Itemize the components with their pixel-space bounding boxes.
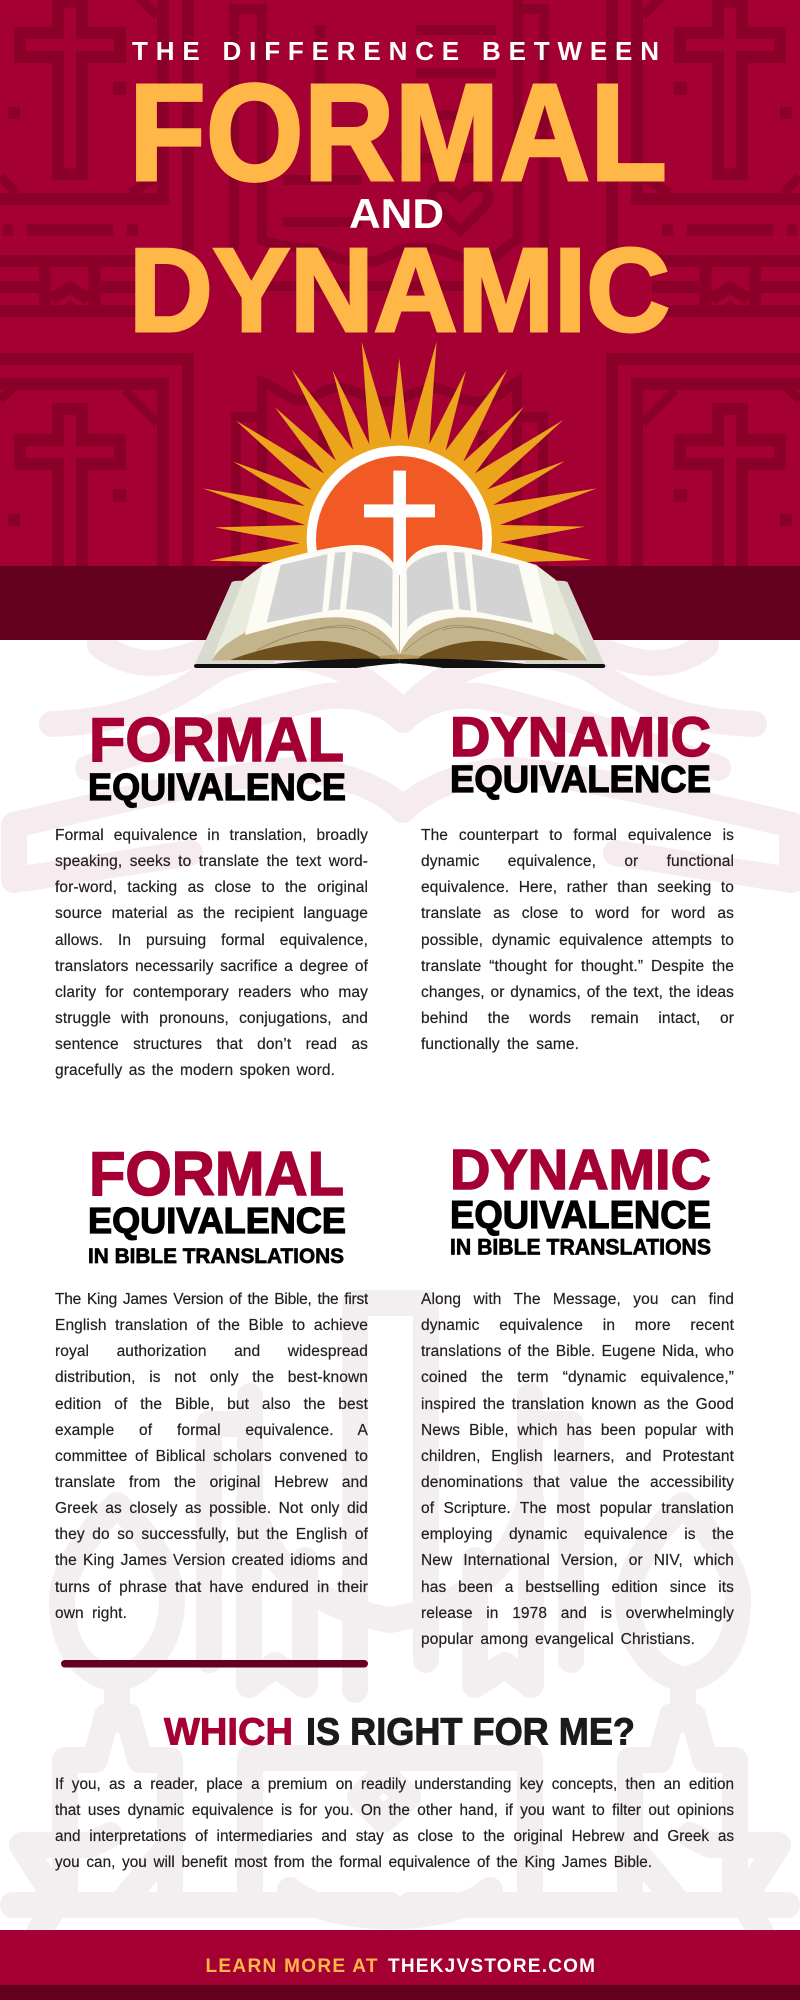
text block: which is right for me: you can, you will benefit most from the formal equivalence of the King James Bible. [55, 1854, 652, 1871]
text block: dynamic equivalence in Bible translations: denominations that value the accessibility [421, 1474, 734, 1491]
text block: formal equivalence in Bible translations: turns of phrase that have endured in their [55, 1579, 368, 1596]
heading: which is right for me: WHICH [164, 1712, 293, 1754]
title word: formal: FORMAL [129, 56, 667, 210]
footer text: THEKJVSTORE.COM [388, 1956, 595, 1977]
heading: formal equivalence in Bible translations: EQUIVALENCE [88, 1200, 346, 1241]
divider bar [61, 1660, 368, 1668]
text block: formal equivalence: allows. In pursuing formal equivalence, [55, 932, 368, 949]
dark band below hero [0, 566, 800, 640]
heading: formal equivalence [88, 706, 346, 809]
cross [364, 471, 435, 583]
text block: formal equivalence in Bible translations: they do so successfully, but the English of [55, 1526, 368, 1543]
text block: dynamic equivalence in Bible translations: translations of the Bible. Eugene Nida, who [421, 1343, 734, 1360]
heading: dynamic equivalence in Bible translations: IN BIBLE TRANSLATIONS [450, 1234, 711, 1260]
heading: dynamic equivalence in Bible translations [450, 1138, 711, 1260]
text block: dynamic equivalence in Bible translations: popular among evangelical Christians. [421, 1631, 695, 1648]
text block: which is right for me [55, 1776, 734, 1871]
text block: dynamic equivalence: translate as close to word for word as [421, 905, 734, 922]
text block: formal equivalence: for-word, tacking as close to the original [55, 879, 368, 896]
watermark: candles, cross and open book, lower section [13, 1303, 787, 1930]
text block: formal equivalence in Bible translations: The King James Version of the Bible, the first [55, 1291, 368, 1308]
text block: which is right for me: that uses dynamic equivalence is for you. On the other hand, if you want to filter out opinions [55, 1802, 734, 1819]
icon: sunburst with cross and open Bible [194, 342, 605, 668]
text block: dynamic equivalence in Bible translations: of Scripture. The most popular translation [421, 1500, 734, 1517]
text block: dynamic equivalence in Bible translations: New International Version, or NIV, which [421, 1552, 734, 1569]
text block: dynamic equivalence in Bible translations: News Bible, which has been popular with [421, 1422, 734, 1439]
text block: formal equivalence: Formal equivalence in translation, broadly [55, 827, 368, 844]
text block: dynamic equivalence: changes, or dynamics, of the text, the ideas [421, 984, 734, 1001]
text block: formal equivalence in Bible translations [55, 1291, 368, 1622]
text block: dynamic equivalence in Bible translations: children, English learners, and Protestant [421, 1448, 734, 1465]
text block: formal equivalence in Bible translations: distribution, is not only the best-known [55, 1369, 368, 1386]
sun disc [307, 446, 492, 631]
text block: dynamic equivalence in Bible translations: dynamic equivalence in more recent [421, 1317, 734, 1334]
text block: dynamic equivalence in Bible translations: Along with The Message, you can find [421, 1291, 734, 1308]
text block: dynamic equivalence in Bible translations: release in 1978 and is overwhelmingly [421, 1605, 734, 1622]
text block: formal equivalence in Bible translations: committee of Biblical scholars convened to [55, 1448, 368, 1465]
text block: formal equivalence in Bible translations: edition of the Bible, but also the best [55, 1396, 368, 1413]
watermark: open book outline, upper section [14, 645, 792, 880]
text block: formal equivalence: translators necessarily sacrifice a degree of [55, 958, 368, 975]
text block: which is right for me: If you, as a reader, place a premium on readily understanding key concepts, then an edition [55, 1776, 734, 1793]
text block: formal equivalence in Bible translations: English translation of the Bible to achieve [55, 1317, 368, 1334]
heading: dynamic equivalence: DYNAMIC [450, 705, 711, 768]
footer text [206, 1956, 595, 1977]
heading: formal equivalence in Bible translations: IN BIBLE TRANSLATIONS [88, 1244, 344, 1268]
text block: dynamic equivalence: possible, dynamic equivalence attempts to [421, 932, 734, 949]
text block: formal equivalence: gracefully as the modern spoken word. [55, 1062, 335, 1079]
text block: dynamic equivalence in Bible translations: has been a bestselling edition since its [421, 1579, 734, 1596]
footer band [0, 1930, 800, 2000]
sun rays [203, 342, 597, 563]
text block: formal equivalence in Bible translations: translate from the original Hebrew and [55, 1474, 368, 1491]
text block: dynamic equivalence [421, 827, 734, 1053]
text block: formal equivalence in Bible translations: own right. [55, 1605, 127, 1622]
heading: formal equivalence in Bible translations [88, 1140, 346, 1268]
title word: and: AND [349, 190, 444, 237]
text block: dynamic equivalence: functionally the same. [421, 1036, 579, 1053]
title [129, 36, 670, 357]
text block: dynamic equivalence: behind the words remain intact, or [421, 1010, 734, 1027]
heading: dynamic equivalence [450, 705, 711, 801]
title line: the difference between: THE DIFFERENCE BETWEEN [132, 36, 659, 66]
hero background [0, 0, 800, 566]
text block: formal equivalence [55, 827, 368, 1079]
text block: dynamic equivalence in Bible translations: coined the term “dynamic equivalence,” [421, 1369, 734, 1386]
hero pattern: crosses, book frames, ribbons [0, 0, 800, 657]
text block: dynamic equivalence: equivalence. Here, rather than seeking to [421, 879, 734, 896]
heading: which is right for me [164, 1712, 635, 1754]
heading: which is right for me: IS RIGHT FOR ME? [306, 1712, 635, 1754]
text block: formal equivalence in Bible translations: Greek as closely as possible. Not only did [55, 1500, 368, 1517]
title word: dynamic: DYNAMIC [129, 224, 670, 357]
text block: formal equivalence: source material as the recipient language [55, 905, 368, 922]
text block: dynamic equivalence: translate “thought for thought.” Despite the [421, 958, 734, 975]
text block: formal equivalence: struggle with pronouns, conjugations, and [55, 1010, 368, 1027]
text block: formal equivalence in Bible translations: the King James Version created idioms and [55, 1552, 368, 1569]
text block: which is right for me: and interpretations of intermediaries and stay as close to the original Hebrew and Greek as [55, 1828, 734, 1845]
footer text: LEARN MORE AT [206, 1956, 378, 1977]
heading: formal equivalence in Bible translations: FORMAL [89, 1140, 344, 1209]
text block: formal equivalence: speaking, seeks to translate the text word- [55, 853, 368, 870]
heading: dynamic equivalence in Bible translations: DYNAMIC [450, 1138, 711, 1202]
text block: formal equivalence: clarity for contemporary readers who may [55, 984, 368, 1001]
heading: dynamic equivalence in Bible translations: EQUIVALENCE [450, 1194, 711, 1237]
text block: formal equivalence in Bible translations: royal authorization and widespread [55, 1343, 368, 1360]
text block: dynamic equivalence in Bible translations: inspired the translation known as the Good [421, 1396, 734, 1413]
text block: dynamic equivalence: dynamic equivalence, or functional [421, 853, 734, 870]
heading: dynamic equivalence: EQUIVALENCE [450, 759, 711, 801]
heading: formal equivalence: FORMAL [89, 706, 344, 775]
text block: formal equivalence in Bible translations: example of formal equivalence. A [55, 1422, 368, 1439]
text block: formal equivalence: sentence structures that don’t read as [55, 1036, 368, 1053]
heading: formal equivalence: EQUIVALENCE [88, 767, 346, 809]
text block: dynamic equivalence in Bible translations: employing dynamic equivalence is the [421, 1526, 734, 1543]
text block: dynamic equivalence in Bible translations [421, 1291, 734, 1648]
open Bible [194, 545, 605, 668]
text block: dynamic equivalence: The counterpart to formal equivalence is [421, 827, 734, 844]
